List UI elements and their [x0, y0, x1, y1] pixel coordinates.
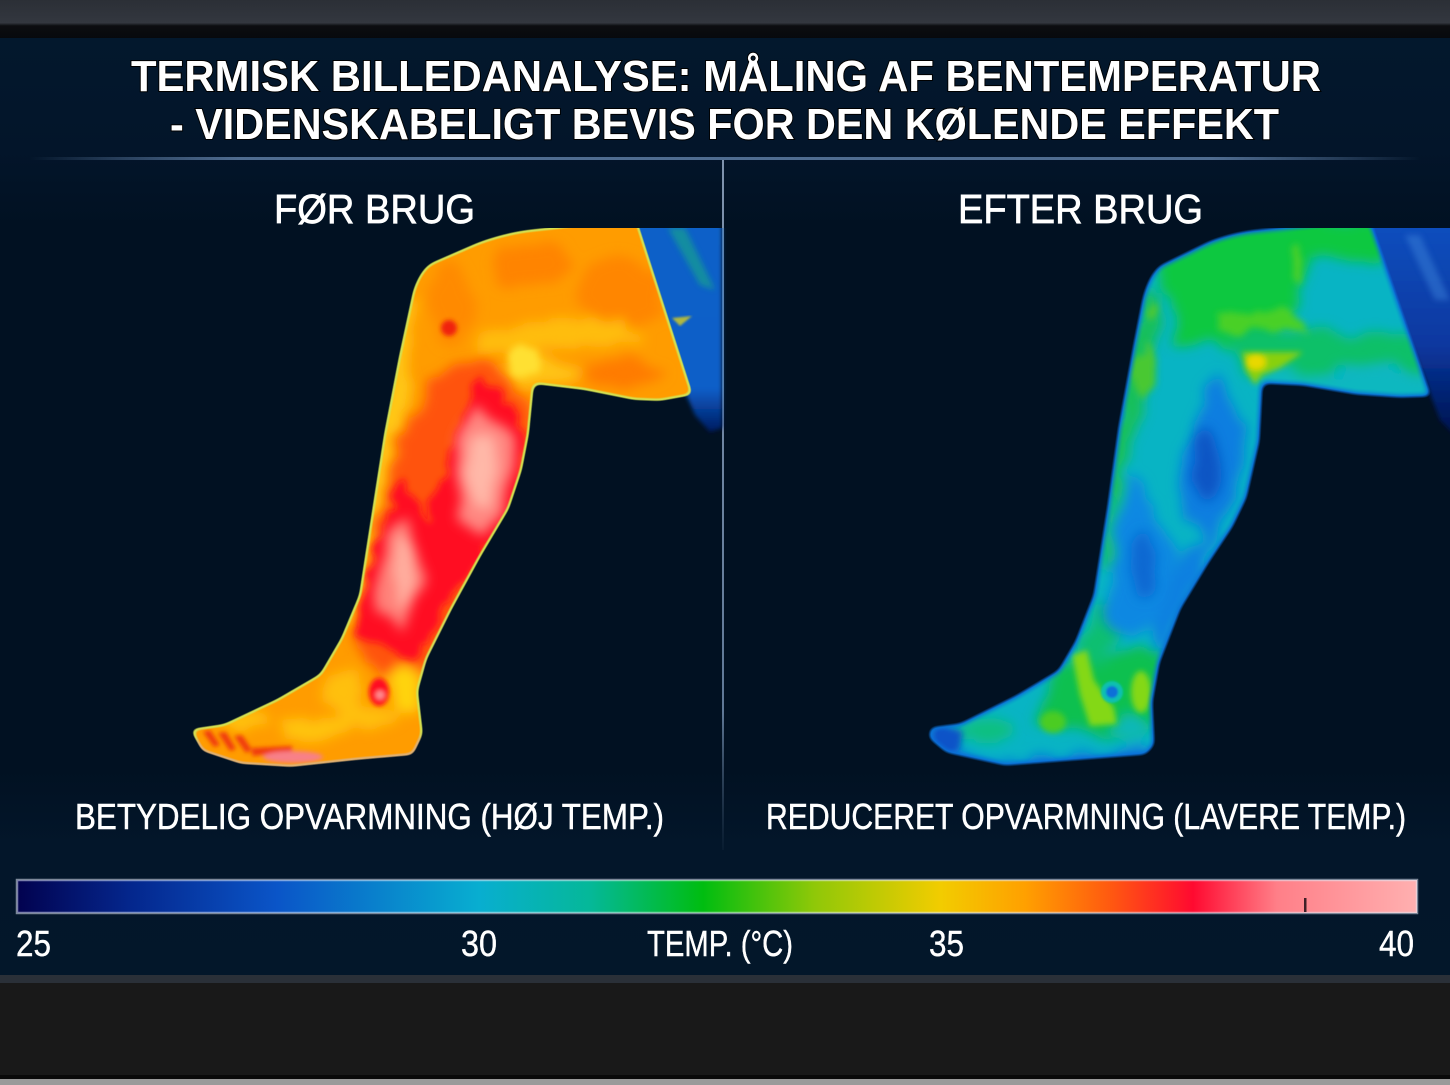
title: [131, 52, 1321, 149]
shorts: before: [639, 228, 726, 434]
title: - VIDENSKABELIGT BEVIS FOR DEN KØLENDE EFFEKT: [170, 100, 1279, 149]
scale labels: 25: [16, 923, 51, 964]
panel: before use: [75, 186, 722, 837]
caption: before: BETYDELIG OPVARMNING (HØJ TEMP.): [75, 796, 664, 837]
shorts: after: [1372, 228, 1450, 432]
thermal leg: before: [192, 228, 692, 768]
leg heat map: after: [934, 228, 1428, 764]
heading: before: FØR BRUG: [274, 186, 475, 232]
scale labels: TEMP. (°C): [647, 923, 793, 964]
heading: after: EFTER BRUG: [958, 186, 1203, 232]
monitor frame: top: [0, 0, 1450, 38]
title: TERMISK BILLEDANALYSE: MÅLING AF BENTEMPERATUR: [131, 52, 1321, 101]
panel: after use: [766, 186, 1450, 837]
temperature colour scale: [17, 880, 1417, 913]
leg outline: before: [192, 228, 692, 768]
thermal leg: after: [928, 228, 1430, 766]
monitor frame: bottom: [0, 975, 1450, 1085]
scale labels: 40: [1379, 923, 1414, 964]
scale labels: 35: [929, 923, 964, 964]
scale labels: [16, 923, 1414, 964]
leg rim: after: [928, 228, 1430, 766]
leg heat map: before: [196, 228, 689, 765]
scale labels: 30: [461, 923, 497, 964]
